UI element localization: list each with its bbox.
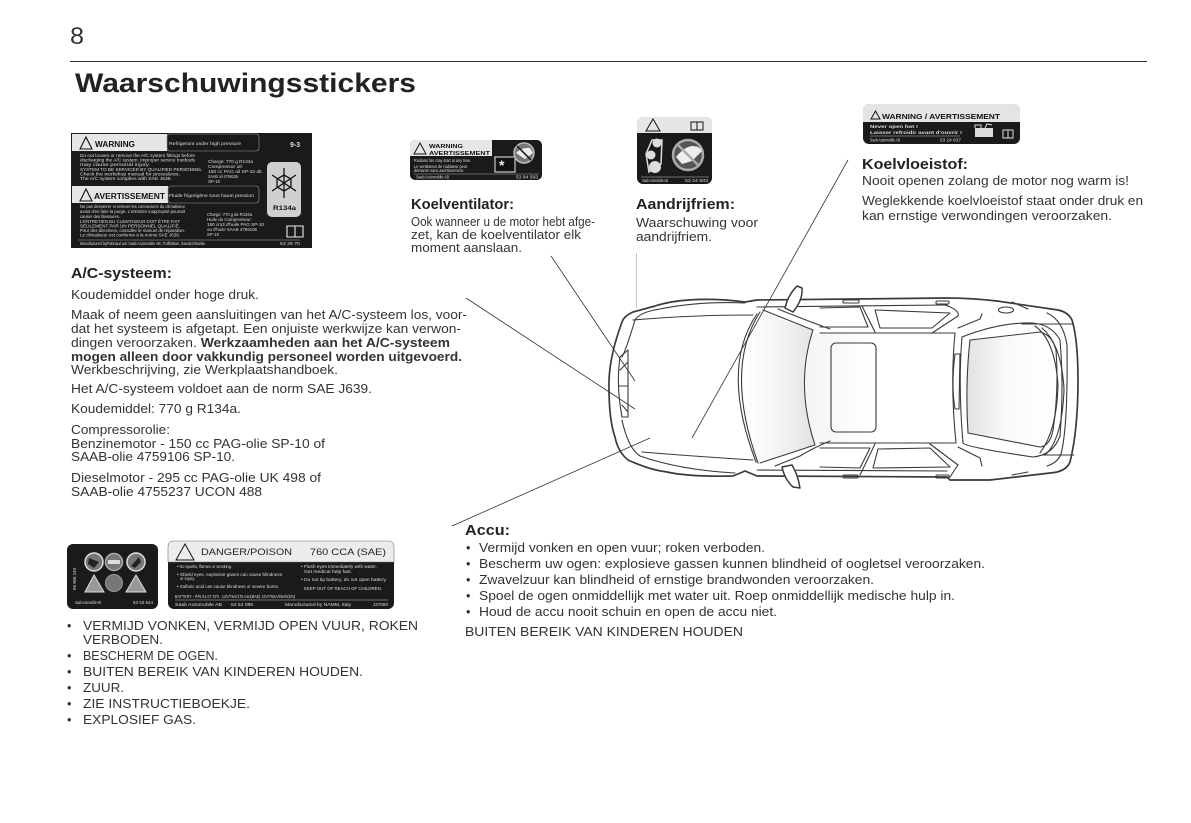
sticker: A/C warning: Fluide frigorigène sous haute pression (169, 193, 255, 198)
sticker: coolant warning: 53 24 637 (940, 138, 962, 142)
sticker: battery danger: 53 54 089 (231, 602, 254, 607)
text block: Accu: BUITEN BEREIK VAN KINDEREN HOUDEN (465, 625, 743, 639)
sticker: A/C warning: 53 29 70 (280, 241, 301, 246)
sticker: coolant warning: Laisser refroidir avant d'ouvrir ! (870, 130, 963, 135)
text block: battery warnings list (67, 619, 418, 727)
sticker: A/C warning (71, 133, 312, 248)
text block: Aandrijfriem: Aandrijfriem: (636, 196, 735, 213)
text block: battery warnings list: ZIE INSTRUCTIEBOEKJE. (83, 697, 250, 711)
text block: Accu: • (466, 573, 470, 587)
sticker: fan warning: WARNING (429, 144, 463, 150)
sticker: fan warning: démarrer sans avertissement. (414, 168, 464, 173)
text block: Koelvloeistof: Nooit openen zolang de motor nog warm is! (862, 174, 1129, 188)
leader line: koelventilator (551, 256, 635, 381)
text block: A/C-systeem: Compressorolie: (71, 423, 170, 437)
sticker: fan warning: Le ventilateur de radiateur peut (414, 164, 468, 169)
text block: Koelventilator: moment aanslaan. (411, 241, 522, 255)
text block: Koelventilator: zet, kan de koelventilator elk (411, 228, 582, 242)
text block: battery warnings list: • (67, 713, 71, 727)
text block: Accu: Houd de accu nooit schuin en open de accu niet. (479, 605, 777, 619)
text block: Koelvloeistof: Koelvloeistof: (862, 156, 968, 173)
text block: Accu: Bescherm uw ogen: explosieve gassen kunnen blindheid of oogletsel veroorzaken. (479, 557, 985, 571)
text block: Accu: Spoel de ogen onmiddellijk met water uit. Roep onmiddellijk medische hulp in. (479, 589, 955, 603)
header rule (70, 60, 1147, 62)
text block: A/C-systeem: SAAB-olie 4759106 SP-10. (71, 450, 235, 464)
car top view (609, 286, 1078, 488)
text block: Accu: • (466, 541, 470, 555)
sticker: A/C warning: Refrigerant under high pressure (169, 141, 242, 146)
sticker: battery danger: J37060 (373, 602, 389, 607)
leader line: koelvloeistof (692, 160, 848, 438)
sticker: battery danger: • Shield eyes, explosive gases can cause blindness (177, 572, 283, 577)
sticker: battery danger: DANGER/POISON (201, 547, 292, 558)
text block: Accu: • (466, 589, 470, 603)
sticker: drive belt warning: Saab Automobile AB (642, 178, 668, 183)
sticker: fan warning: Radiator fan may start at any time. (414, 158, 471, 163)
sticker: A/C warning: ou d'huile SAAB 4759106 (207, 227, 257, 232)
text block: Accu: Accu: (465, 522, 510, 539)
leader line: accu (452, 438, 650, 526)
sticker: A/C warning: may cause personal injury. (80, 162, 150, 167)
sticker: battery danger: • Do not tip battery, do not open battery. (301, 577, 387, 582)
sticker: coolant warning: WARNING / AVERTISSEMENT (882, 112, 1000, 121)
sticker: A/C warning: Pour des directives, consulter le manuel de réparation. (80, 228, 185, 233)
sticker: A/C warning: Le climatiseur est conforme à la norme SAE J639. (80, 232, 180, 238)
sticker: coolant warning: Saab Automobile AB (870, 138, 900, 142)
text block: Aandrijfriem (636, 196, 758, 244)
sticker: A/C warning: causer des blessures. (80, 214, 120, 219)
text block: battery warnings list: ZUUR. (83, 681, 124, 695)
sticker: battery danger: Saab Automobile AB (175, 602, 222, 607)
sticker: A/C warning: Check the workshop manual for procedures. (80, 172, 180, 176)
sticker: A/C warning: 9-3 (290, 142, 300, 149)
text block: Koelventilator (411, 196, 595, 255)
sticker: A/C warning: SYSTEM TO BE SERVICED BY QUALIFIED PERSONNEL (80, 167, 203, 172)
text block: battery warnings list: BESCHERM DE OGEN. (83, 649, 218, 663)
text block: A/C-systeem: SAAB-olie 4755237 UCON 488 (71, 485, 262, 499)
text block: Accu: • (466, 605, 470, 619)
sticker: A/C warning: The A/C system complies with SAE J639. (80, 176, 172, 181)
text block: battery warnings list: • (67, 665, 71, 679)
text block: A/C-systeem: Benzinemotor - 150 cc PAG-olie SP-10 of (71, 437, 326, 451)
sticker: A/C warning: R134a (273, 205, 296, 212)
sticker: fan warning (410, 140, 542, 180)
text block: A/C-systeem: dat het systeem is afgetapt. Een onjuiste werkwijze kan verwon- (71, 322, 461, 336)
title: Waarschuwingsstickers (75, 68, 416, 98)
sticker: A/C warning: SP-10 (207, 232, 219, 237)
text block: A/C-systeem (71, 265, 467, 499)
text block: A/C-systeem: Maak of neem geen aansluitingen van het A/C-systeem los, voor- (71, 308, 467, 322)
text block: A/C-systeem: Koudemiddel onder hoge druk. (71, 288, 259, 302)
text block: A/C-systeem: A/C-systeem: (71, 265, 172, 282)
sticker: A/C warning: 150 cm3 d'huile PAG SP-10 (207, 222, 265, 227)
sticker: battery danger: • Flush eyes immediately with water. (301, 564, 377, 569)
text block: battery warnings list: • (67, 649, 71, 663)
sticker: battery symbols: 53 53 644 (133, 600, 153, 605)
text block: Koelvloeistof: Weglekkende koelvloeistof staat onder druk en (862, 194, 1143, 208)
sticker: battery danger: • Sulfuric acid can cause blindness or severe burns. (177, 584, 279, 589)
sticker: coolant warning: Never open hot ! (870, 124, 919, 129)
sticker: fan warning: Saab Automobile AB (416, 174, 449, 180)
sticker: A/C warning: Compressor oil: (208, 164, 243, 169)
text block: A/C-systeem: Werkbeschrijving, zie Werkplaatshandboek. (71, 363, 338, 377)
text block: Accu: • (466, 557, 470, 571)
sticker: A/C warning: SEULEMENT PAR UN PERSONNEL QUALIFIÉ. (80, 222, 180, 228)
text block: A/C-systeem: Koudemiddel: 770 g R134a. (71, 402, 241, 416)
text block: A/C-systeem: Dieselmotor - 295 cc PAG-olie UK 498 of (71, 471, 322, 485)
sticker: battery symbols: Saab Automobile AB (75, 600, 101, 605)
text block: battery warnings list: • (67, 681, 71, 695)
text block: battery warnings list: • (67, 619, 71, 633)
sticker: A/C warning: 150 cc PAG oil SP-10 alt. (208, 169, 263, 174)
text block: battery warnings list: VERBODEN. (83, 633, 163, 647)
leader line: A/C (466, 298, 635, 409)
sticker: battery symbols (67, 544, 158, 609)
sticker: A/C warning: Manufactured by/Fabriqué par Saab Automobile AB, Trollhättan, Sweden/Suède (80, 241, 205, 246)
sticker: A/C warning: WARNING (95, 140, 135, 149)
text block: battery warnings list: EXPLOSIEF GAS. (83, 713, 196, 727)
text block: Accu: Vermijd vonken en open vuur; roken verboden. (479, 541, 765, 555)
sticker: battery danger: BATTERY - P/N 51 07 370 . 12V/76A/175 min(BAE) 12V/760A/95Ah(EN) (175, 594, 295, 599)
text block: battery warnings list: BUITEN BEREIK VAN KINDEREN HOUDEN. (83, 665, 363, 679)
page number: 8 (70, 23, 84, 50)
sticker: drive belt warning: 53 24 603 (685, 178, 709, 183)
text block: A/C-systeem: Het A/C-systeem voldoet aan de norm SAE J639. (71, 382, 372, 396)
sticker: A/C warning: L'ENTRETIEN DU CLIMATISEUR DOIT ÊTRE FAIT (80, 217, 180, 224)
sticker: A/C warning: discharging the A/C system. Improper service methods (80, 158, 196, 162)
sticker: A/C warning: AVERTISSEMENT (94, 192, 165, 201)
sticker: battery danger: Manufactured by NAMM, Italy (285, 602, 352, 607)
text block: battery warnings list: • (67, 697, 71, 711)
sticker: A/C warning: SP-10 (208, 179, 220, 184)
sticker: battery danger: • No sparks, flames or smoking. (177, 564, 232, 569)
sticker: coolant warning (863, 104, 1020, 144)
text block: Accu: Zwavelzuur kan blindheid of ernstige brandwonden veroorzaken. (479, 573, 874, 587)
sticker: fan warning: 53 84 593 (516, 174, 539, 180)
text block: Koelvloeistof (862, 156, 1143, 223)
text block: Aandrijfriem: aandrijfriem. (636, 230, 712, 244)
sticker: A/C warning: Charge: 770 g de R134a (207, 212, 252, 217)
sticker: battery danger: Get medical help fast. (304, 569, 352, 574)
sticker: battery danger: 760 CCA (SAE) (310, 547, 386, 558)
text block: A/C-systeem: mogen alleen door vakkundig personeel worden uitgevoerd. (71, 350, 462, 364)
text block: A/C-systeem: dingen veroorzaken. Werkzaamheden aan het A/C-systeem (71, 336, 450, 350)
text block: Koelventilator: Koelventilator: (411, 196, 514, 213)
sticker: fan warning: AVERTISSEMENT (429, 151, 491, 157)
sticker: A/C warning: Huile du Compresseur: (207, 217, 252, 222)
text block: battery warnings list: VERMIJD VONKEN, VERMIJD OPEN VUUR, ROKEN (83, 619, 418, 633)
sticker: battery symbols: 06 956 249 (72, 568, 77, 590)
sticker: battery danger: or injury. (180, 576, 195, 581)
text block: Koelventilator: Ook wanneer u de motor hebt afge- (411, 215, 595, 229)
sticker: A/C warning: avant d'en faire la purge. L'entretien inapproprié pourrait (80, 209, 186, 214)
text block: Koelvloeistof: kan ernstige verwondingen veroorzaken. (862, 209, 1112, 223)
leader line: aandrijfriem (636, 253, 638, 308)
sticker: A/C warning: Charge: 770 g R134a (208, 159, 254, 164)
sticker: fan warning: * (499, 157, 505, 173)
sticker: A/C warning: Do not loosen or remove the A/C system fittings before (80, 153, 196, 158)
text block: Aandrijfriem: Waarschuwing voor (636, 216, 758, 230)
sticker: battery danger (168, 541, 394, 609)
sticker: battery danger: KEEP OUT OF REACH OF CHILDREN. (304, 586, 382, 591)
text block: Accu (465, 522, 985, 639)
sticker: A/C warning: SAAB oil 4759106 (208, 174, 238, 179)
sticker: drive belt warning (637, 117, 712, 184)
sticker: A/C warning: Ne pas desserrer ni enlever les connexions du climatiseur (80, 204, 185, 209)
